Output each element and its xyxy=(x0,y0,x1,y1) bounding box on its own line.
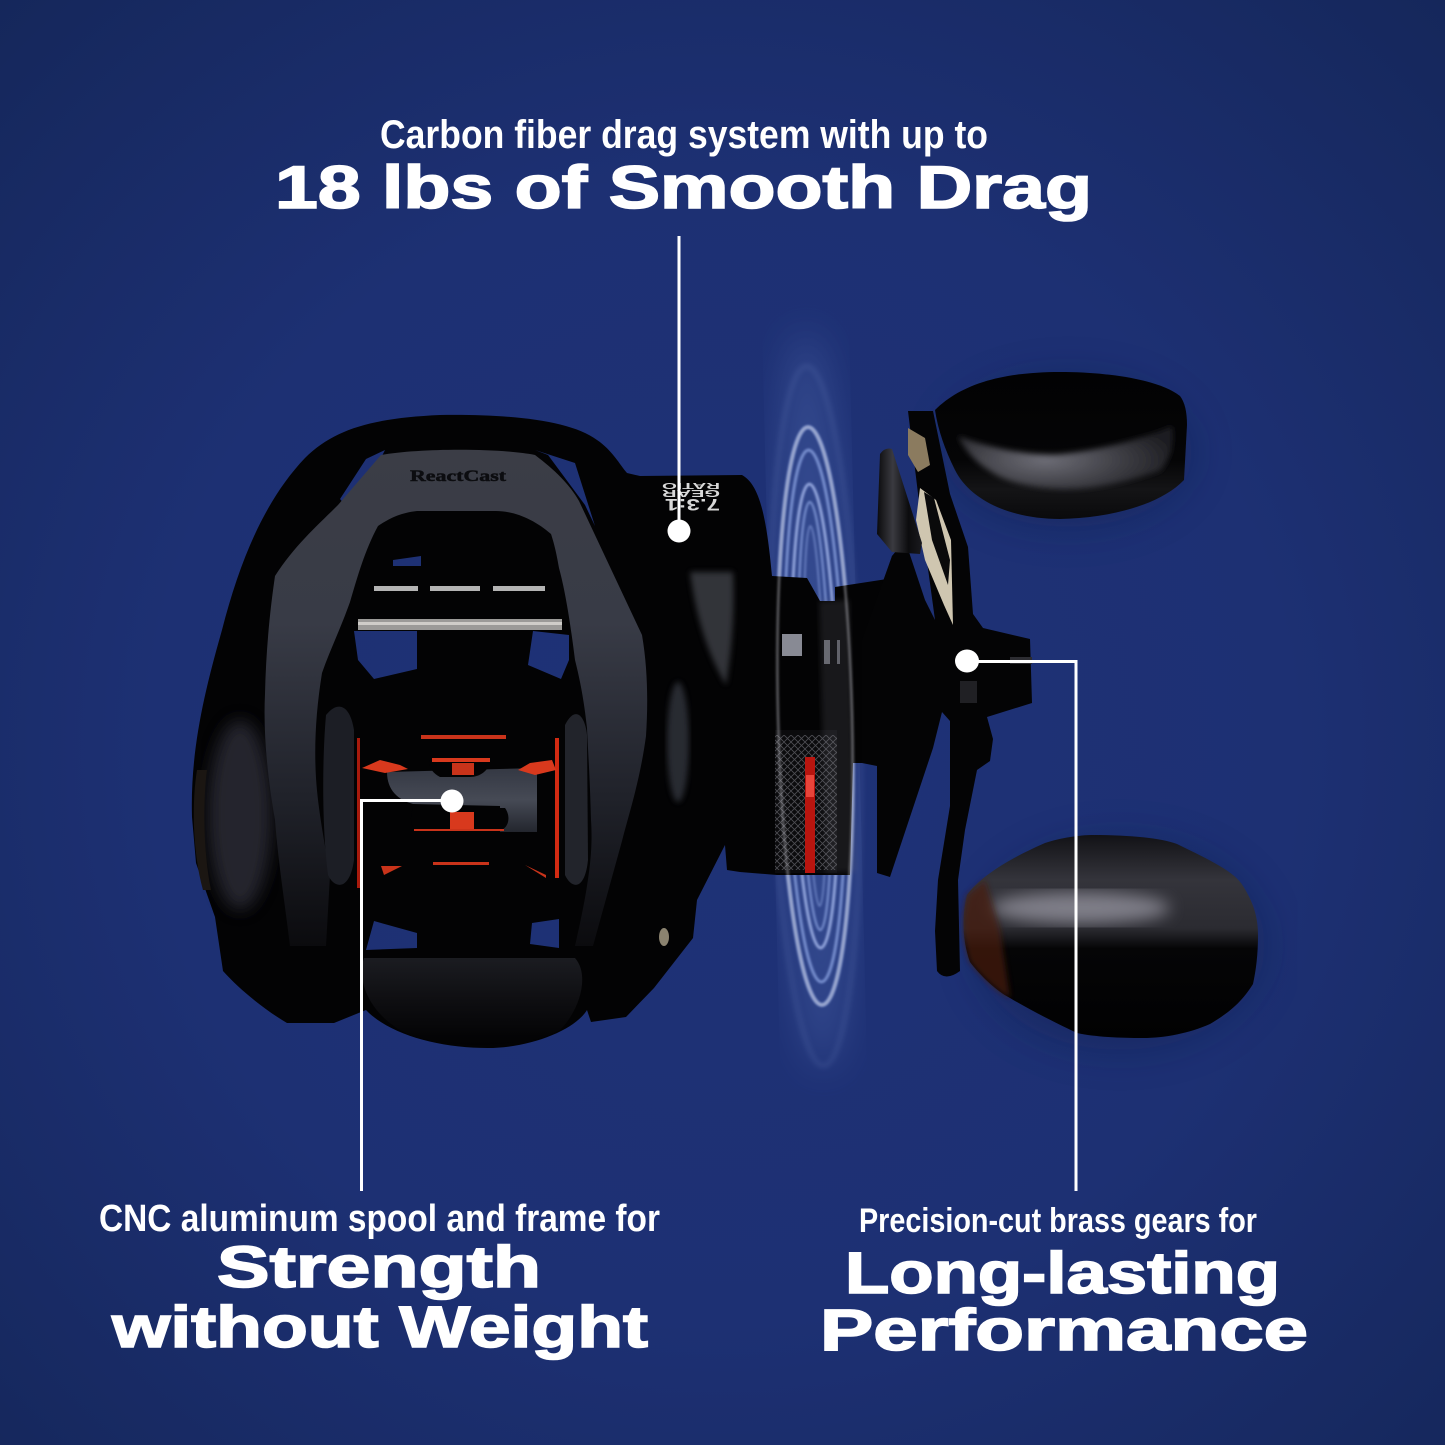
reel body silhouette xyxy=(192,415,898,1048)
text block: gears xyxy=(820,1202,1308,1363)
gear ratio label: RATIO xyxy=(662,481,720,490)
upper handle knob xyxy=(935,372,1187,519)
reel soft shadow xyxy=(943,377,1265,1050)
spool with red accents xyxy=(357,735,559,888)
left side shading xyxy=(208,720,272,910)
left dial edge xyxy=(194,770,211,890)
drag star lever xyxy=(877,449,922,554)
text block: spool: CNC aluminum spool and frame for xyxy=(99,1198,660,1240)
callout line: gears xyxy=(955,650,1076,1191)
frame screw xyxy=(659,928,669,946)
brand name: ReactCast xyxy=(410,468,507,485)
fishing reel xyxy=(192,372,1258,1048)
right body highlights xyxy=(690,572,734,685)
text block: gears: Performance xyxy=(820,1298,1308,1363)
grey side-plate arch xyxy=(265,450,647,946)
handle nut xyxy=(960,657,1032,703)
text block: spool xyxy=(99,1198,660,1360)
gear ratio label: 7.3:1 xyxy=(665,495,720,514)
heading: drag: Carbon fiber drag system with up to xyxy=(380,113,988,157)
callout line: drag xyxy=(668,236,690,542)
lower right body highlight xyxy=(667,682,689,802)
text block: spool: without Weight xyxy=(111,1295,648,1360)
text block: spool: Strength xyxy=(217,1235,541,1300)
heading: drag: 18 lbs of Smooth Drag xyxy=(275,154,1092,221)
translucent rings over hub xyxy=(771,426,859,1006)
spool flanges xyxy=(323,707,588,885)
drag knurled wheel xyxy=(775,730,837,873)
gear ratio label: GEAR xyxy=(660,487,720,498)
crank cream highlight xyxy=(908,428,953,625)
gear ratio label xyxy=(660,481,720,514)
hub metal highlights xyxy=(782,634,899,664)
level wind bars xyxy=(358,584,562,630)
swirl motion rings xyxy=(761,329,869,1071)
bottom pot xyxy=(362,958,582,1045)
heading: drag xyxy=(275,113,1092,221)
text block: gears: Precision-cut brass gears for xyxy=(859,1202,1257,1240)
lower handle knob xyxy=(964,835,1258,1038)
callout line: spool xyxy=(362,790,464,1191)
crank arm xyxy=(862,411,1032,976)
text block: gears: Long-lasting xyxy=(845,1241,1280,1306)
